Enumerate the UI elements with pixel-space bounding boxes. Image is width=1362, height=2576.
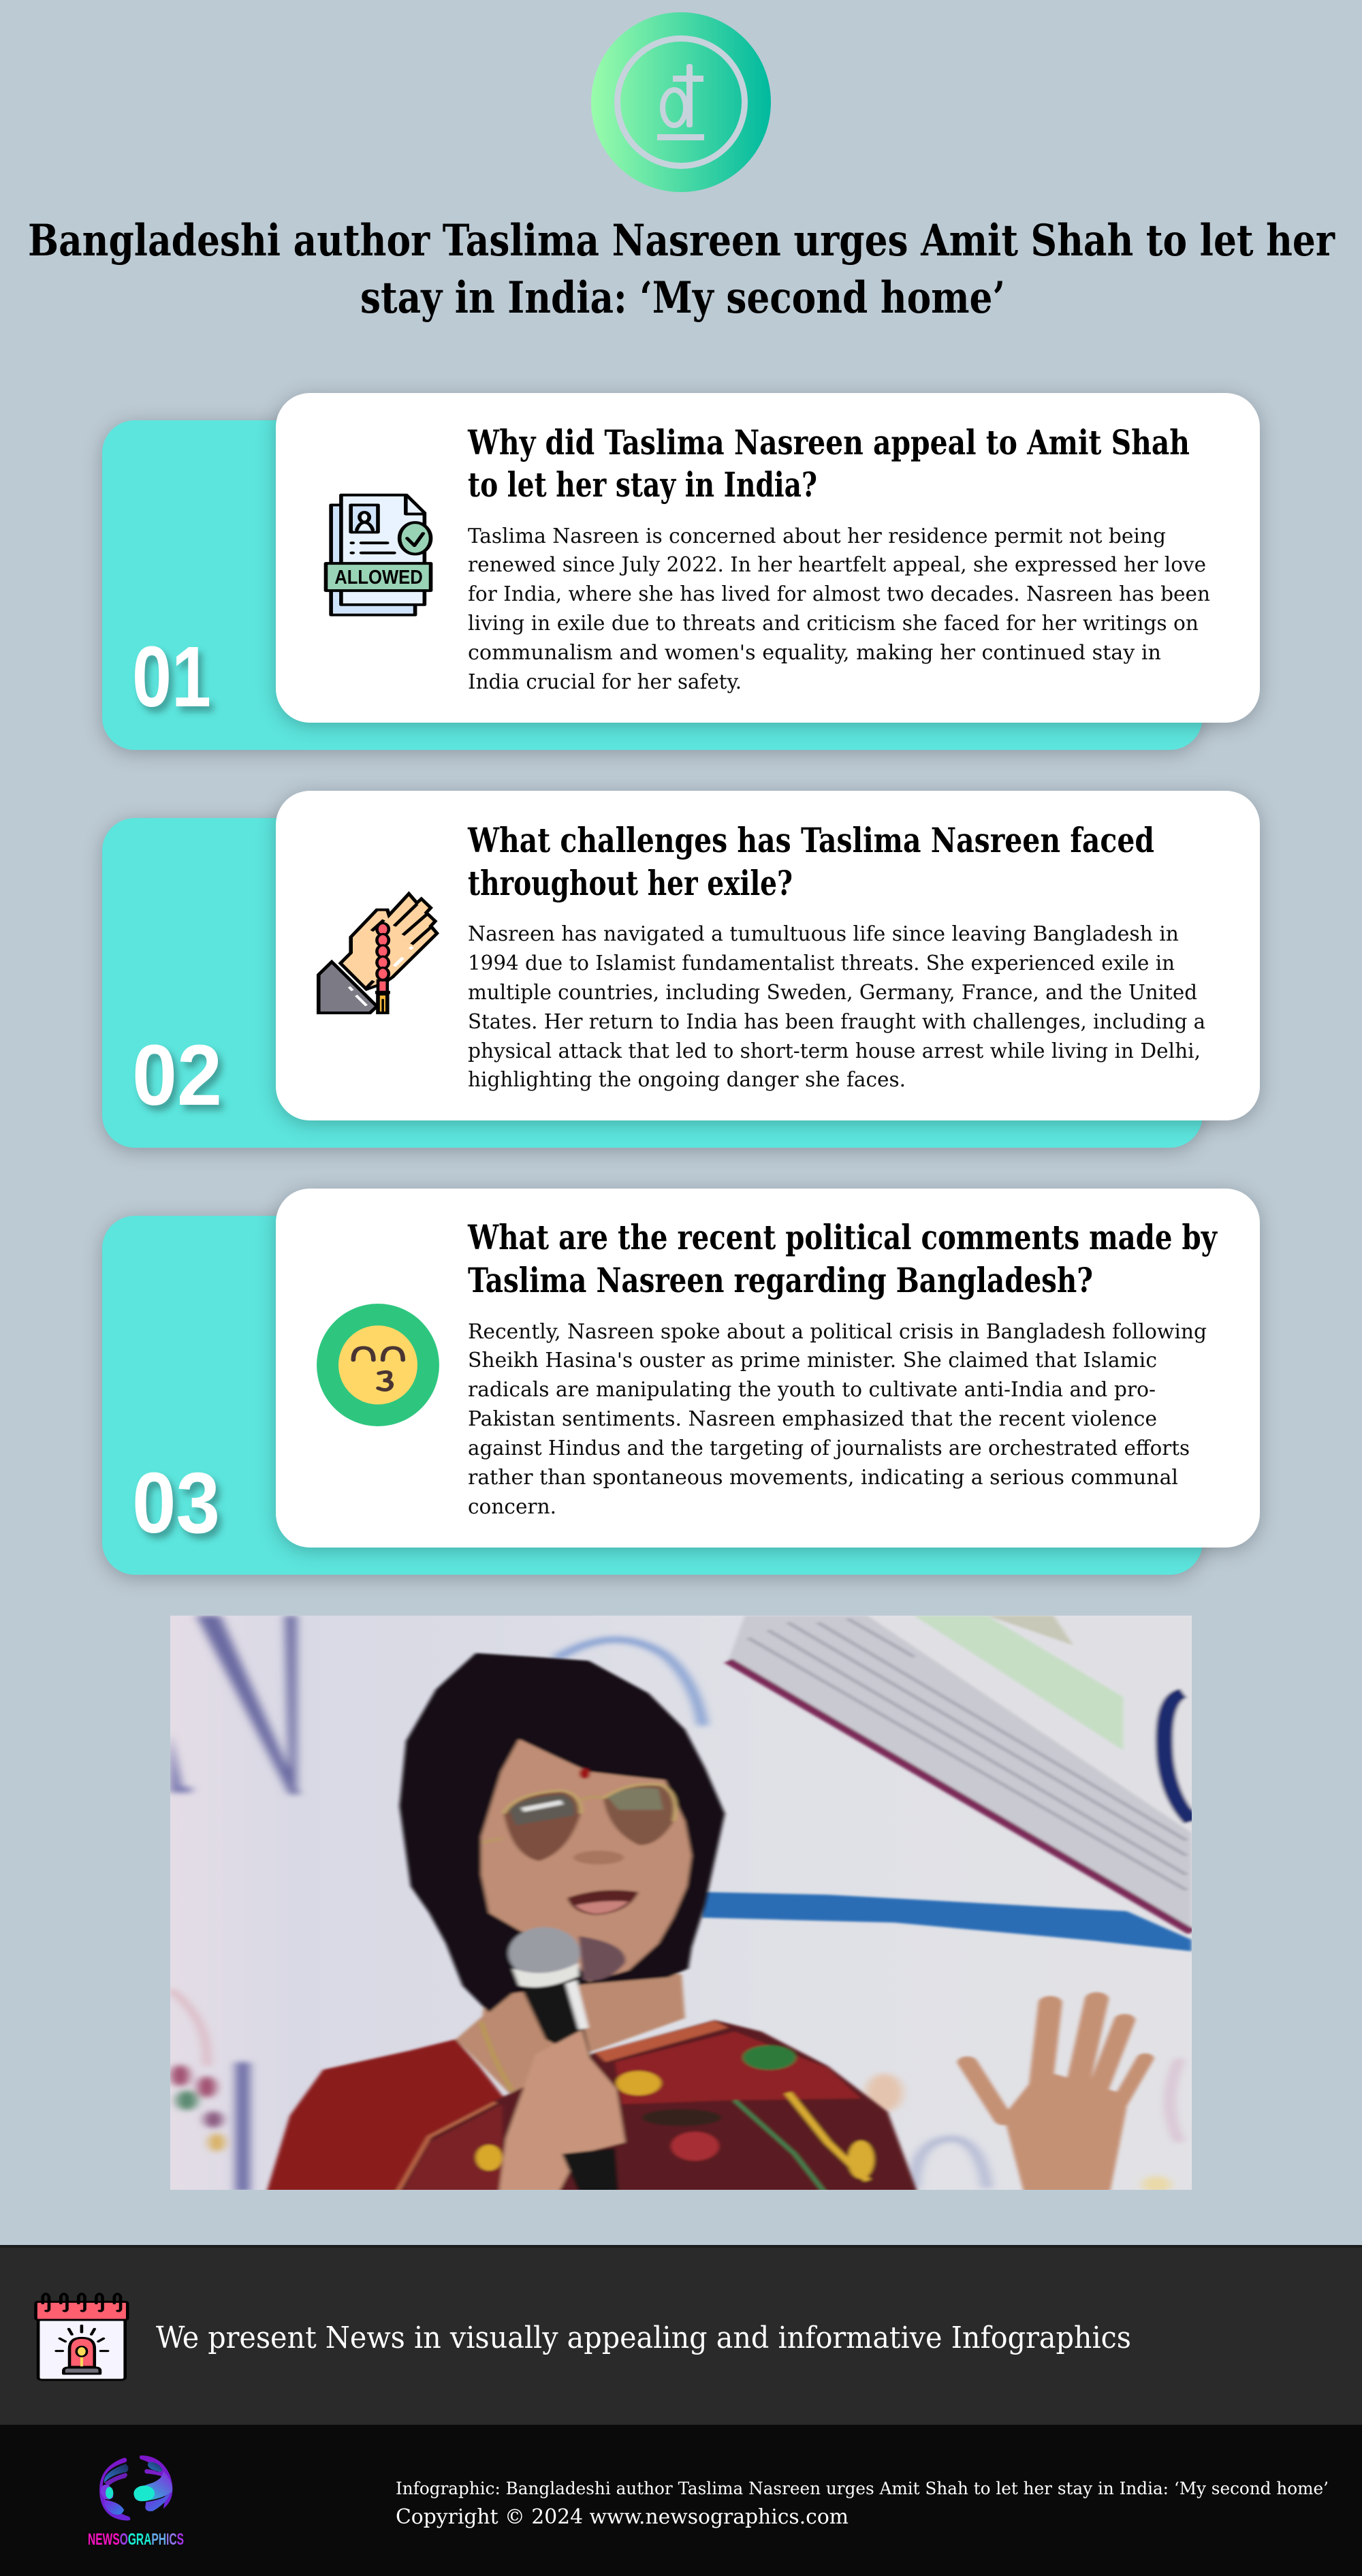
neck and chest (456, 1970, 685, 2096)
book and banner artwork (701, 1616, 1192, 1951)
panel: question 3 (102, 1189, 1260, 1575)
body text 2: physical attack that led to short-term house arrest while living in Delhi, (468, 1039, 1201, 1063)
nose shadow (573, 1851, 624, 1864)
body text 1: living in exile due to threats and criticism she faced for her writings on (468, 612, 1199, 635)
body text 3: against Hindus and the targeting of journalists are orchestrated efforts (468, 1436, 1190, 1460)
face (481, 1739, 692, 1982)
body text 2: States. Her return to India has been fraught with challenges, including a (468, 1010, 1205, 1034)
body text 3: Sheikh Hasina's ouster as prime minister. She claimed that Islamic (468, 1349, 1157, 1372)
teal backing card 3 (102, 1216, 1203, 1575)
title (28, 215, 1335, 324)
hand holding mic (499, 2030, 625, 2192)
body text 1: communalism and women's equality, making her continued stay in (468, 641, 1161, 665)
heading 3 (467, 1217, 1218, 1300)
body text 1: renewed since July 2022. In her heartfelt appeal, she expressed her love (468, 553, 1206, 577)
logo: Newsographics: NEWSOGRAPHICS (88, 2530, 184, 2549)
heading 2: throughout her exile? (468, 863, 793, 903)
heading 1: to let her stay in India? (468, 465, 817, 505)
icon: allowed document (326, 495, 431, 615)
panel: question 2 (102, 791, 1260, 1148)
credit text: Copyright © 2024 www.newsographics.com (396, 2505, 849, 2529)
body text 3: radicals are manipulating the youth to cultivate anti-India and pro- (468, 1378, 1156, 1402)
body text 2: Nasreen has navigated a tumultuous life since leaving Bangladesh in (468, 922, 1179, 946)
body text 3: Pakistan sentiments. Nasreen emphasized that the recent violence (468, 1407, 1157, 1431)
body text 3: rather than spontaneous movements, indicating a serious communal (468, 1466, 1178, 1490)
title: stay in India: ‘My second home’ (360, 272, 1005, 324)
body text 1: for India, where she has lived for almost two decades. Nasreen has been (468, 582, 1210, 606)
bindi (580, 1768, 590, 1779)
body text 1: Taslima Nasreen is concerned about her residence permit not being (468, 524, 1166, 548)
heading 2 (467, 820, 1154, 903)
logo: currency coin (591, 12, 771, 192)
sunglasses (504, 1791, 581, 1861)
number 03: 03 (132, 1455, 220, 1551)
heading 3: Taslima Nasreen regarding Bangladesh? (468, 1260, 1093, 1300)
teal backing card 2 (102, 818, 1203, 1148)
heading 1: Why did Taslima Nasreen appeal to Amit Shah (467, 422, 1190, 462)
number 02: 02 (132, 1027, 222, 1123)
teal backing card 1 (102, 420, 1203, 750)
white card 2 (276, 791, 1260, 1120)
number 01: 01 (132, 629, 211, 725)
white card 1 (276, 393, 1260, 723)
icon: calendar with siren (36, 2293, 127, 2380)
body text 3: Recently, Nasreen spoke about a political crisis in Bangladesh following (468, 1320, 1207, 1344)
person (266, 1653, 1145, 2192)
sari (396, 2020, 917, 2192)
credit text: Infographic: Bangladeshi author Taslima Nasreen urges Amit Shah to let her stay in India: ‘My second home’ (396, 2479, 1329, 2498)
raised hand (967, 1999, 1145, 2120)
mic head (508, 1927, 580, 1979)
logo: Newsographics (88, 2455, 184, 2549)
icon: allowed document: ALLOWED (334, 567, 423, 588)
body text 2: multiple countries, including Sweden, Germany, France, and the United (468, 981, 1197, 1005)
body text 1: India crucial for her safety. (468, 670, 742, 694)
microphone body (522, 1980, 592, 2062)
photo: Taslima Nasreen speaking at a microphone (170, 1616, 1192, 2193)
hair (399, 1653, 725, 2013)
footer band: tagline (0, 2245, 1362, 2425)
mouth (567, 1890, 639, 1915)
body text 1 (468, 524, 1210, 694)
footer band: credits (0, 2425, 1362, 2576)
body text 3: concern. (468, 1495, 556, 1519)
body text 2: 1994 due to Islamist fundamentalist threats. She experienced exile in (468, 952, 1175, 975)
heading 3: What are the recent political comments made by (467, 1217, 1218, 1257)
tagline text: We present News in visually appealing and informative Infographics (156, 2321, 1131, 2355)
heading 1 (467, 422, 1190, 505)
white card 3 (276, 1189, 1260, 1548)
body text 2 (468, 922, 1205, 1092)
body text 3 (468, 1320, 1207, 1519)
heading 2: What challenges has Taslima Nasreen faced (467, 820, 1154, 860)
body text 2: highlighting the ongoing danger she faces. (468, 1068, 906, 1092)
credit text (396, 2479, 1329, 2529)
icon: praying hands with beads (319, 894, 437, 1013)
icon: kissing face emoji (317, 1304, 439, 1426)
panel: question 1 (102, 393, 1260, 750)
blouse (266, 2039, 509, 2192)
